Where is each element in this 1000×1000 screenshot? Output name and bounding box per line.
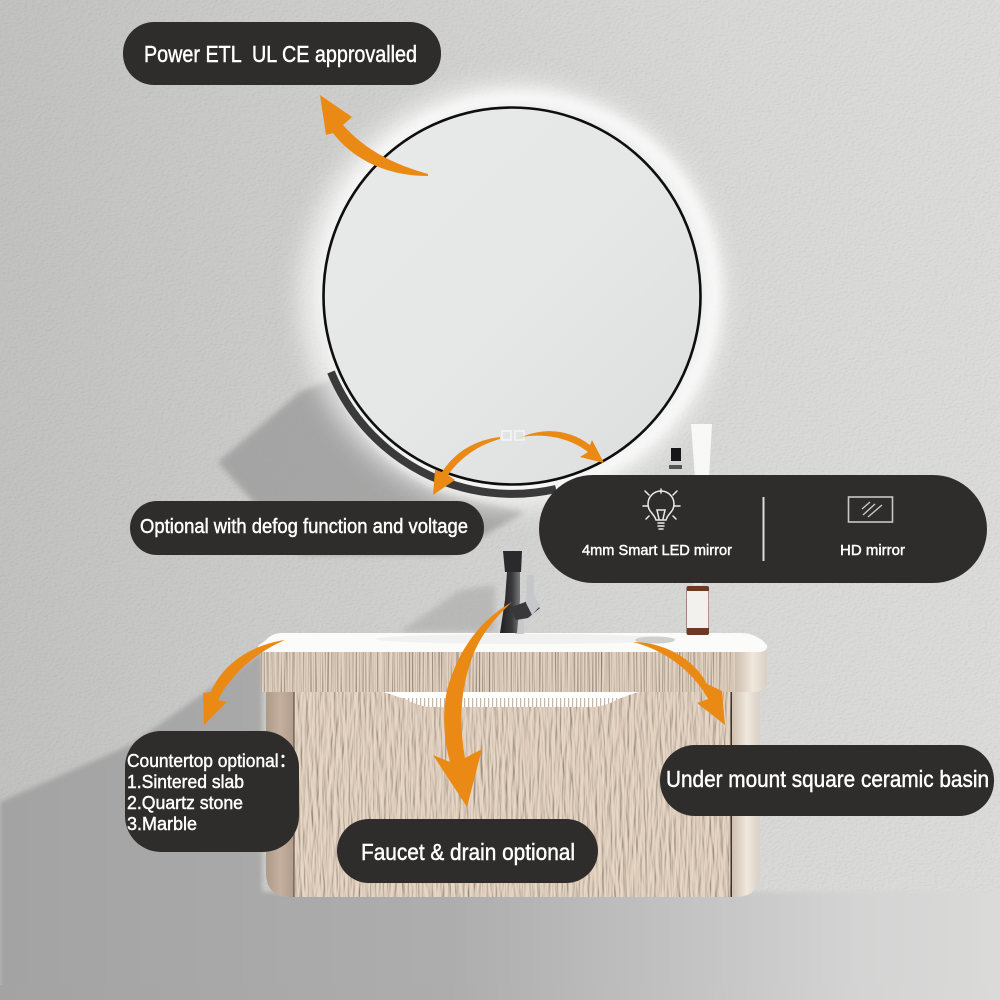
callout: countertop options bbox=[125, 731, 299, 852]
callout: faucet and drain bbox=[337, 819, 598, 883]
arrow: LED mirror bbox=[522, 431, 604, 463]
faucet bbox=[500, 551, 540, 634]
round LED mirror bbox=[324, 108, 700, 494]
icon: HD mirror bbox=[848, 497, 892, 522]
toiletry bottles on shelf bbox=[667, 424, 712, 479]
callout: countertop options: Countertop optional： bbox=[127, 750, 296, 771]
divider bbox=[762, 497, 764, 561]
arrow: countertop bbox=[203, 640, 285, 725]
mirror backlight glow bbox=[316, 98, 714, 492]
mirror cast shadow on wall bbox=[218, 378, 525, 555]
arrow: ceramic basin bbox=[633, 642, 725, 725]
callout: defog option: Optional with defog function and voltage bbox=[140, 516, 468, 538]
mirror disc bbox=[324, 108, 700, 484]
panel: mirror features bbox=[539, 475, 987, 583]
callout: countertop options: 1.Sintered slab bbox=[127, 771, 244, 792]
dark bottle bbox=[667, 448, 684, 479]
callout: defog option bbox=[130, 501, 484, 555]
text: smart LED mirror: 4mm Smart LED mirror bbox=[582, 542, 732, 559]
arrow: faucet and drain bbox=[433, 602, 512, 807]
arrow: defog and voltage bbox=[433, 437, 500, 495]
undermount basin edge bbox=[376, 634, 676, 644]
callout: countertop options: 2.Quartz stone bbox=[127, 792, 243, 813]
callout: countertop options: 3.Marble bbox=[127, 813, 197, 834]
amber bottle on counter bbox=[686, 577, 709, 635]
white countertop bbox=[258, 633, 767, 652]
callout: ceramic basin bbox=[660, 745, 994, 816]
cabinet cast shadow on wall bbox=[0, 585, 1000, 1000]
callout: faucet and drain: Faucet & drain optional bbox=[361, 839, 575, 865]
white tube bbox=[691, 424, 712, 478]
handle recess bbox=[294, 692, 640, 707]
mirror shelf arc bbox=[331, 372, 556, 494]
ribbed upper band bbox=[261, 651, 767, 692]
cabinet front with wave texture bbox=[266, 692, 760, 897]
callout: certification bbox=[123, 22, 441, 85]
callout: certification: Power ETL UL CE approvalled bbox=[144, 41, 417, 67]
touch buttons bbox=[502, 431, 524, 440]
vanity cabinet bbox=[258, 633, 767, 897]
text: HD mirror: HD mirror bbox=[840, 542, 905, 559]
icon: light bulb bbox=[643, 489, 680, 529]
arrow: power certification bbox=[320, 95, 428, 176]
